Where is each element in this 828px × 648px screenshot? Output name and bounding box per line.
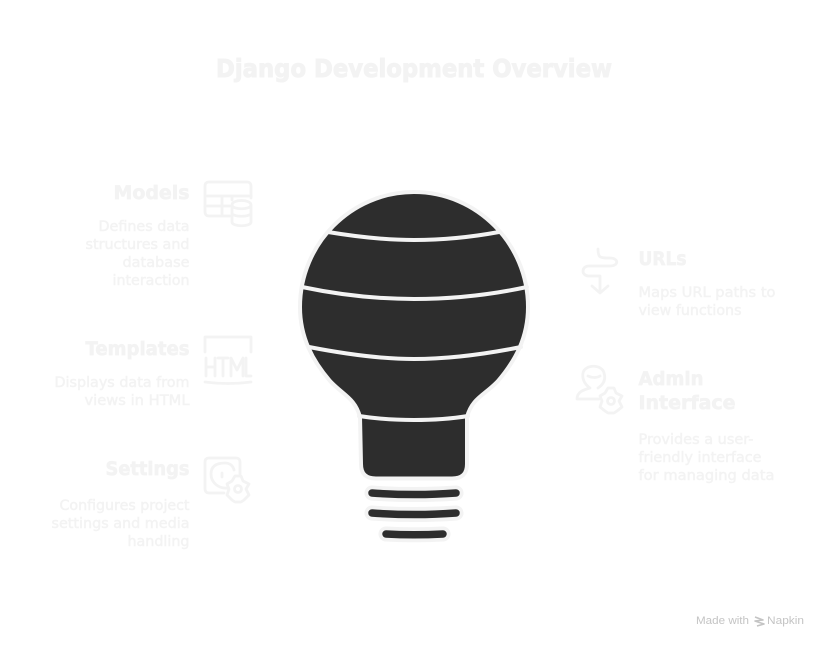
heading: admin interface: [638, 368, 736, 414]
watermark: made with napkin: [696, 615, 804, 627]
description: urls: [638, 285, 776, 319]
description: settings: settings and media: [52, 516, 190, 532]
icon: user and gear: [577, 366, 622, 413]
panel: settings: [52, 458, 249, 550]
panel: models: [86, 182, 251, 289]
icon: gear and dial: [205, 458, 249, 502]
description: urls: Maps URL paths to: [638, 285, 776, 301]
description: urls: view functions: [638, 303, 742, 319]
description: models: structures and: [86, 237, 190, 253]
description: models: [86, 219, 190, 289]
bulb body: [300, 192, 528, 478]
description: admin interface: friendly interface: [638, 450, 762, 466]
description: settings: Configures project: [60, 498, 190, 514]
lightbulb: [300, 192, 528, 535]
description: templates: Displays data from: [54, 375, 190, 391]
description: admin interface: [638, 432, 774, 484]
description: models: Defines data: [98, 219, 190, 235]
description: settings: [52, 498, 190, 550]
description: models: interaction: [112, 273, 190, 289]
panel: urls: [583, 248, 776, 319]
panel: templates: [54, 337, 251, 409]
description: admin interface: Provides a user-: [638, 432, 754, 448]
title: Django Development Overview: [216, 54, 612, 83]
description: settings: handling: [128, 534, 190, 550]
bulb base bars: [372, 493, 456, 535]
heading: settings: Settings: [106, 458, 190, 480]
heading: models: Models: [114, 182, 190, 204]
panel: admin interface: [577, 366, 774, 484]
description: models: database: [122, 255, 190, 271]
heading: urls: URLs: [638, 248, 686, 270]
bulb band dividers: [302, 232, 527, 420]
icon: napkin logo: [755, 617, 764, 626]
icon: html document: [205, 337, 251, 384]
watermark: made with napkin: Napkin: [767, 615, 804, 627]
watermark: made with napkin: Made with: [696, 615, 749, 627]
icon: table and database: [205, 182, 251, 226]
icon: winding arrow: [583, 249, 617, 293]
heading: admin interface: Admin: [638, 368, 704, 390]
description: templates: views in HTML: [84, 393, 190, 409]
description: templates: [54, 375, 190, 409]
description: admin interface: for managing data: [638, 468, 774, 484]
heading: templates: Templates: [86, 338, 190, 360]
heading: admin interface: Interface: [638, 392, 736, 414]
